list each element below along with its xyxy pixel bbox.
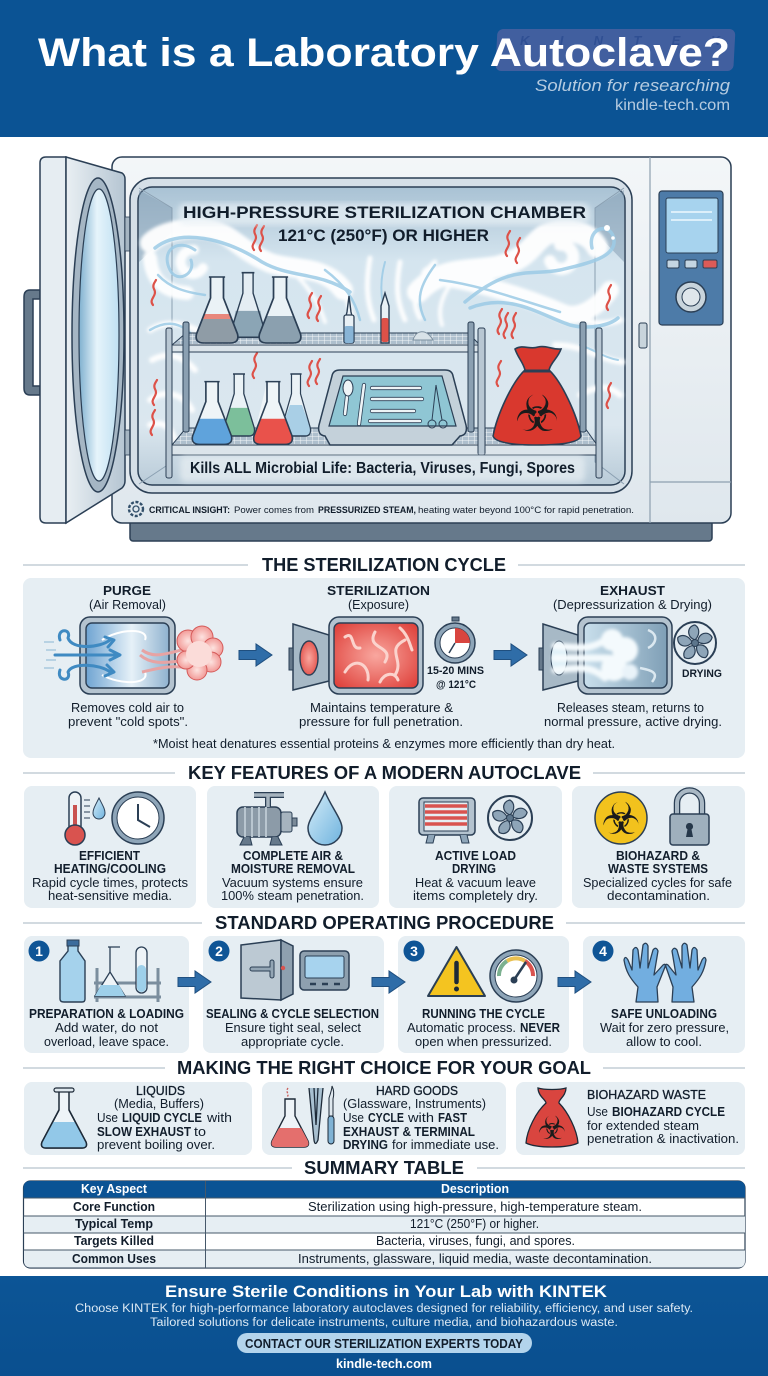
step: sterilization: (Exposure) bbox=[348, 598, 409, 612]
panel: active load drying: Heat & vacuum leave bbox=[415, 876, 536, 890]
row: targets killed bbox=[74, 1234, 575, 1248]
row: typical temp bbox=[75, 1217, 539, 1231]
chamber title bbox=[178, 203, 590, 245]
website: kindle-tech.com bbox=[615, 97, 730, 114]
panel: hard goods: HARD GOODS bbox=[376, 1084, 458, 1098]
panel: liquids bbox=[24, 1082, 252, 1155]
panel: liquids: LIQUIDS bbox=[136, 1084, 185, 1098]
panel: active load drying: ACTIVE LOAD bbox=[435, 849, 516, 863]
panel: active load drying bbox=[389, 786, 562, 908]
row: typical temp: 121°C (250°F) or higher. bbox=[410, 1217, 539, 1231]
step number 4 bbox=[592, 940, 614, 962]
row: common uses: Instruments, glassware, liquid media, waste decontamination. bbox=[298, 1252, 652, 1266]
panel: biohazard and waste systems: decontamination. bbox=[607, 889, 710, 903]
icon: thermometer, drop and clock bbox=[65, 792, 164, 845]
panel: hard goods: FAST bbox=[438, 1111, 467, 1125]
KINTEK watermark: KINTEK bbox=[520, 33, 722, 48]
panel: biohazard waste: BIOHAZARD WASTE bbox=[587, 1088, 706, 1102]
panel: biohazard and waste systems: Specialized cycles for safe bbox=[583, 876, 732, 890]
icon: biohazard bag bbox=[526, 1088, 578, 1147]
table header: Description bbox=[441, 1182, 509, 1196]
step: purge: prevent "cold spots". bbox=[68, 715, 188, 729]
panel: efficient heating: Rapid cycle times, protects bbox=[32, 876, 188, 890]
panel: active load drying: DRYING bbox=[452, 862, 496, 876]
upper shelf flasks bbox=[196, 273, 301, 343]
panel: sterilization cycle bbox=[23, 578, 745, 758]
step: purge: PURGE bbox=[103, 584, 151, 598]
row: typical temp: Typical Temp bbox=[75, 1217, 153, 1231]
panel: step 1 preparation: PREPARATION & LOADING bbox=[29, 1007, 184, 1021]
step number 3 bbox=[404, 940, 424, 962]
flames bbox=[151, 225, 611, 435]
row: common uses: Common Uses bbox=[72, 1252, 156, 1266]
panel: liquids: SLOW EXHAUST bbox=[97, 1125, 191, 1139]
heading: sterilization cycle: THE STERILIZATION CYCLE bbox=[262, 555, 506, 575]
header banner bbox=[0, 0, 768, 137]
panel: biohazard waste: BIOHAZARD CYCLE bbox=[612, 1105, 725, 1119]
panel: biohazard and waste systems: BIOHAZARD & bbox=[616, 849, 700, 863]
step number 2 bbox=[208, 940, 230, 962]
panel: step 3 running: RUNNING THE CYCLE bbox=[422, 1007, 545, 1021]
step: sterilization: @ 121°C bbox=[436, 679, 476, 691]
KINTEK watermark bbox=[495, 29, 735, 71]
footer heading: Ensure Sterile Conditions in Your Lab with KINTEK bbox=[165, 1282, 608, 1301]
arrow: step 1 to 2 bbox=[178, 971, 211, 993]
footer call to action bbox=[0, 1276, 768, 1376]
panel: biohazard waste: penetration & inactivation. bbox=[587, 1132, 739, 1146]
table header: Key Aspect bbox=[81, 1182, 148, 1196]
step: purge: Removes cold air to bbox=[71, 701, 184, 715]
panel: step 1 preparation bbox=[24, 936, 189, 1053]
panel: liquids: (Media, Buffers) bbox=[114, 1097, 204, 1111]
footnote: *Moist heat denatures essential proteins & enzymes more efficiently than dry heat. bbox=[153, 737, 615, 751]
step: sterilization: 15-20 MINS bbox=[427, 665, 484, 677]
panel: biohazard waste bbox=[516, 1082, 745, 1155]
arrow bbox=[494, 644, 527, 666]
chamber shelves bbox=[166, 322, 602, 478]
step: sterilization: pressure for full penetration. bbox=[299, 715, 463, 729]
critical insight note bbox=[129, 502, 634, 516]
footer website: kindle-tech.com bbox=[336, 1357, 432, 1371]
step number 3: 3 bbox=[410, 943, 418, 959]
contact button: CONTACT OUR STERILIZATION EXPERTS TODAY bbox=[245, 1337, 524, 1351]
biohazard bag bbox=[493, 347, 581, 445]
step: sterilization bbox=[289, 584, 484, 729]
panel: hard goods bbox=[262, 1082, 506, 1155]
icon: exhaust chamber bbox=[539, 617, 672, 694]
panel: biohazard waste: for extended steam bbox=[587, 1119, 699, 1133]
chamber frame bbox=[130, 178, 632, 493]
panel: liquids: LIQUID CYCLE bbox=[122, 1111, 202, 1125]
panel: liquids: with bbox=[206, 1111, 232, 1125]
icon: purge chamber bbox=[44, 617, 223, 694]
summary table bbox=[24, 1181, 745, 1268]
panel: step 2 sealing: SEALING & CYCLE SELECTION bbox=[206, 1007, 379, 1021]
kills caption bbox=[180, 456, 585, 482]
panel: efficient heating: EFFICIENT bbox=[79, 849, 140, 863]
kills caption: Kills ALL Microbial Life: Bacteria, Viruses, Fungi, Spores bbox=[190, 460, 575, 477]
lower shelf flasks bbox=[192, 374, 311, 444]
icon: biohazard sign and padlock bbox=[595, 790, 709, 845]
panel: step 2 sealing bbox=[203, 936, 384, 1053]
step: exhaust: DRYING bbox=[682, 668, 722, 680]
step: purge bbox=[44, 584, 223, 729]
icon: protective gloves bbox=[624, 943, 706, 1002]
icon: heated chamber bbox=[289, 617, 423, 694]
panel: hard goods: DRYING bbox=[343, 1138, 388, 1152]
contact button bbox=[237, 1333, 532, 1353]
step number 1: 1 bbox=[35, 943, 43, 959]
panel: step 3 running: Automatic process. bbox=[407, 1021, 516, 1035]
panel: air and moisture removal: MOISTURE REMOVAL bbox=[231, 862, 355, 876]
control panel bbox=[659, 191, 723, 325]
row: common uses bbox=[72, 1252, 652, 1266]
door latch bbox=[639, 323, 647, 348]
footer description: Tailored solutions for delicate instruments, culture media, and biohazardous waste. bbox=[150, 1317, 618, 1329]
chamber title: HIGH-PRESSURE STERILIZATION CHAMBER bbox=[183, 203, 586, 222]
step number 2: 2 bbox=[215, 943, 223, 959]
panel: step 4 unloading: Wait for zero pressure, bbox=[600, 1021, 729, 1035]
row: core function: Core Function bbox=[73, 1200, 155, 1214]
row: core function: Sterilization using high-pressure, high-temperature steam. bbox=[308, 1200, 642, 1214]
critical insight note: Power comes from bbox=[234, 505, 314, 516]
panel: hard goods: EXHAUST & TERMINAL bbox=[343, 1125, 475, 1139]
icon: gear bbox=[129, 502, 143, 516]
critical insight note: heating water beyond 100°C for rapid penetration. bbox=[418, 505, 634, 516]
sealed vials bbox=[344, 293, 433, 343]
panel: step 3 running: open when pressurized. bbox=[415, 1035, 552, 1049]
panel: liquids: to bbox=[194, 1125, 206, 1139]
icon: biohazard sign and padlock: ☣ bbox=[601, 794, 641, 845]
step: sterilization: STERILIZATION bbox=[327, 584, 430, 598]
door handle bbox=[24, 290, 40, 395]
footer description: Choose KINTEK for high-performance laboratory autoclaves designed for reliability, efficiency, and user safety. bbox=[75, 1303, 693, 1315]
open door bbox=[40, 157, 131, 523]
icon: sealed door and display bbox=[241, 940, 349, 1000]
instrument tray bbox=[319, 370, 466, 445]
heading: making the right choice: MAKING THE RIGHT CHOICE FOR YOUR GOAL bbox=[177, 1058, 591, 1078]
icon: warning sign and pressure gauge bbox=[428, 947, 542, 1002]
step: exhaust: Releases steam, returns to bbox=[557, 701, 704, 715]
row: targets killed: Targets Killed bbox=[74, 1234, 154, 1248]
arrow: step 2 to 3 bbox=[372, 971, 405, 993]
base plinth bbox=[130, 518, 712, 541]
step: purge: (Air Removal) bbox=[89, 598, 166, 612]
icon: vacuum pump and drop bbox=[237, 792, 342, 845]
panel: air and moisture removal: COMPLETE AIR & bbox=[243, 849, 343, 863]
row: targets killed: Bacteria, viruses, fungi, and spores. bbox=[376, 1234, 575, 1248]
heading: key features: KEY FEATURES OF A MODERN AUTOCLAVE bbox=[188, 763, 581, 783]
panel: hard goods: Use bbox=[343, 1111, 364, 1125]
heading: standard operating procedure: STANDARD OPERATING PROCEDURE bbox=[215, 913, 554, 933]
step: exhaust: (Depressurization & Drying) bbox=[553, 598, 712, 612]
icon: biohazard bag: ☣ bbox=[538, 1109, 566, 1147]
steam swirls bbox=[150, 225, 622, 440]
biohazard bag: ☣ bbox=[515, 385, 559, 443]
arrow bbox=[239, 644, 272, 666]
illustration: autoclave machine bbox=[24, 157, 731, 541]
step: exhaust: EXHAUST bbox=[600, 584, 665, 598]
step number 1 bbox=[28, 940, 50, 962]
panel: step 3 running bbox=[398, 936, 569, 1053]
icon: stopwatch bbox=[435, 617, 475, 663]
panel: efficient heating: heat-sensitive media. bbox=[48, 889, 172, 903]
panel: step 4 unloading bbox=[583, 936, 745, 1053]
panel: air and moisture removal: 100% steam penetration. bbox=[221, 889, 364, 903]
icon: flask and instruments bbox=[272, 1086, 334, 1147]
step number 4: 4 bbox=[599, 943, 607, 959]
panel: biohazard and waste systems: WASTE SYSTEMS bbox=[608, 862, 708, 876]
icon: drying fan bbox=[674, 622, 716, 664]
step: exhaust: normal pressure, active drying. bbox=[544, 715, 722, 729]
panel: active load drying: items completely dry. bbox=[413, 889, 538, 903]
chamber interior bbox=[138, 187, 625, 485]
panel: step 4 unloading: allow to cool. bbox=[626, 1035, 702, 1049]
icon: liquid flask bbox=[42, 1088, 86, 1148]
icon: heater and fan bbox=[419, 796, 532, 843]
heading: summary table: SUMMARY TABLE bbox=[304, 1158, 464, 1178]
panel: hard goods: CYCLE bbox=[368, 1111, 404, 1125]
panel: biohazard and waste systems bbox=[572, 786, 745, 908]
panel: efficient heating: HEATING/COOLING bbox=[54, 862, 166, 876]
panel: step 2 sealing: Ensure tight seal, select bbox=[225, 1021, 362, 1035]
step: sterilization: Maintains temperature & bbox=[310, 701, 454, 715]
panel: step 1 preparation: Add water, do not bbox=[55, 1021, 159, 1035]
panel: hard goods: (Glassware, Instruments) bbox=[343, 1097, 486, 1111]
panel: air and moisture removal: Vacuum systems ensure bbox=[222, 876, 363, 890]
table header bbox=[81, 1182, 509, 1196]
row: core function bbox=[73, 1200, 642, 1214]
panel: step 4 unloading: SAFE UNLOADING bbox=[611, 1007, 717, 1021]
arrow: step 3 to 4 bbox=[558, 971, 591, 993]
panel: liquids: prevent boiling over. bbox=[97, 1138, 215, 1152]
subtitle: Solution for researching bbox=[535, 76, 731, 95]
critical insight note: PRESSURIZED STEAM, bbox=[318, 505, 416, 516]
panel: liquids: Use bbox=[97, 1111, 118, 1125]
chamber title: 121°C (250°F) OR HIGHER bbox=[278, 226, 489, 245]
title: What is a Laboratory Autoclave? bbox=[38, 31, 730, 75]
footer description bbox=[75, 1303, 693, 1329]
icon: water bottle and glassware rack bbox=[60, 940, 161, 1002]
panel: air and moisture removal bbox=[207, 786, 379, 908]
panel: efficient heating bbox=[24, 786, 196, 908]
machine body bbox=[112, 157, 731, 523]
panel: step 1 preparation: overload, leave space. bbox=[44, 1035, 169, 1049]
panel: hard goods: for immediate use. bbox=[392, 1138, 499, 1152]
panel: hard goods: with bbox=[407, 1111, 434, 1125]
critical insight note: CRITICAL INSIGHT: bbox=[149, 505, 230, 516]
panel: step 3 running: NEVER bbox=[520, 1021, 560, 1035]
step: exhaust bbox=[539, 584, 722, 729]
panel: biohazard waste: Use bbox=[587, 1105, 608, 1119]
panel: step 2 sealing: appropriate cycle. bbox=[241, 1035, 344, 1049]
